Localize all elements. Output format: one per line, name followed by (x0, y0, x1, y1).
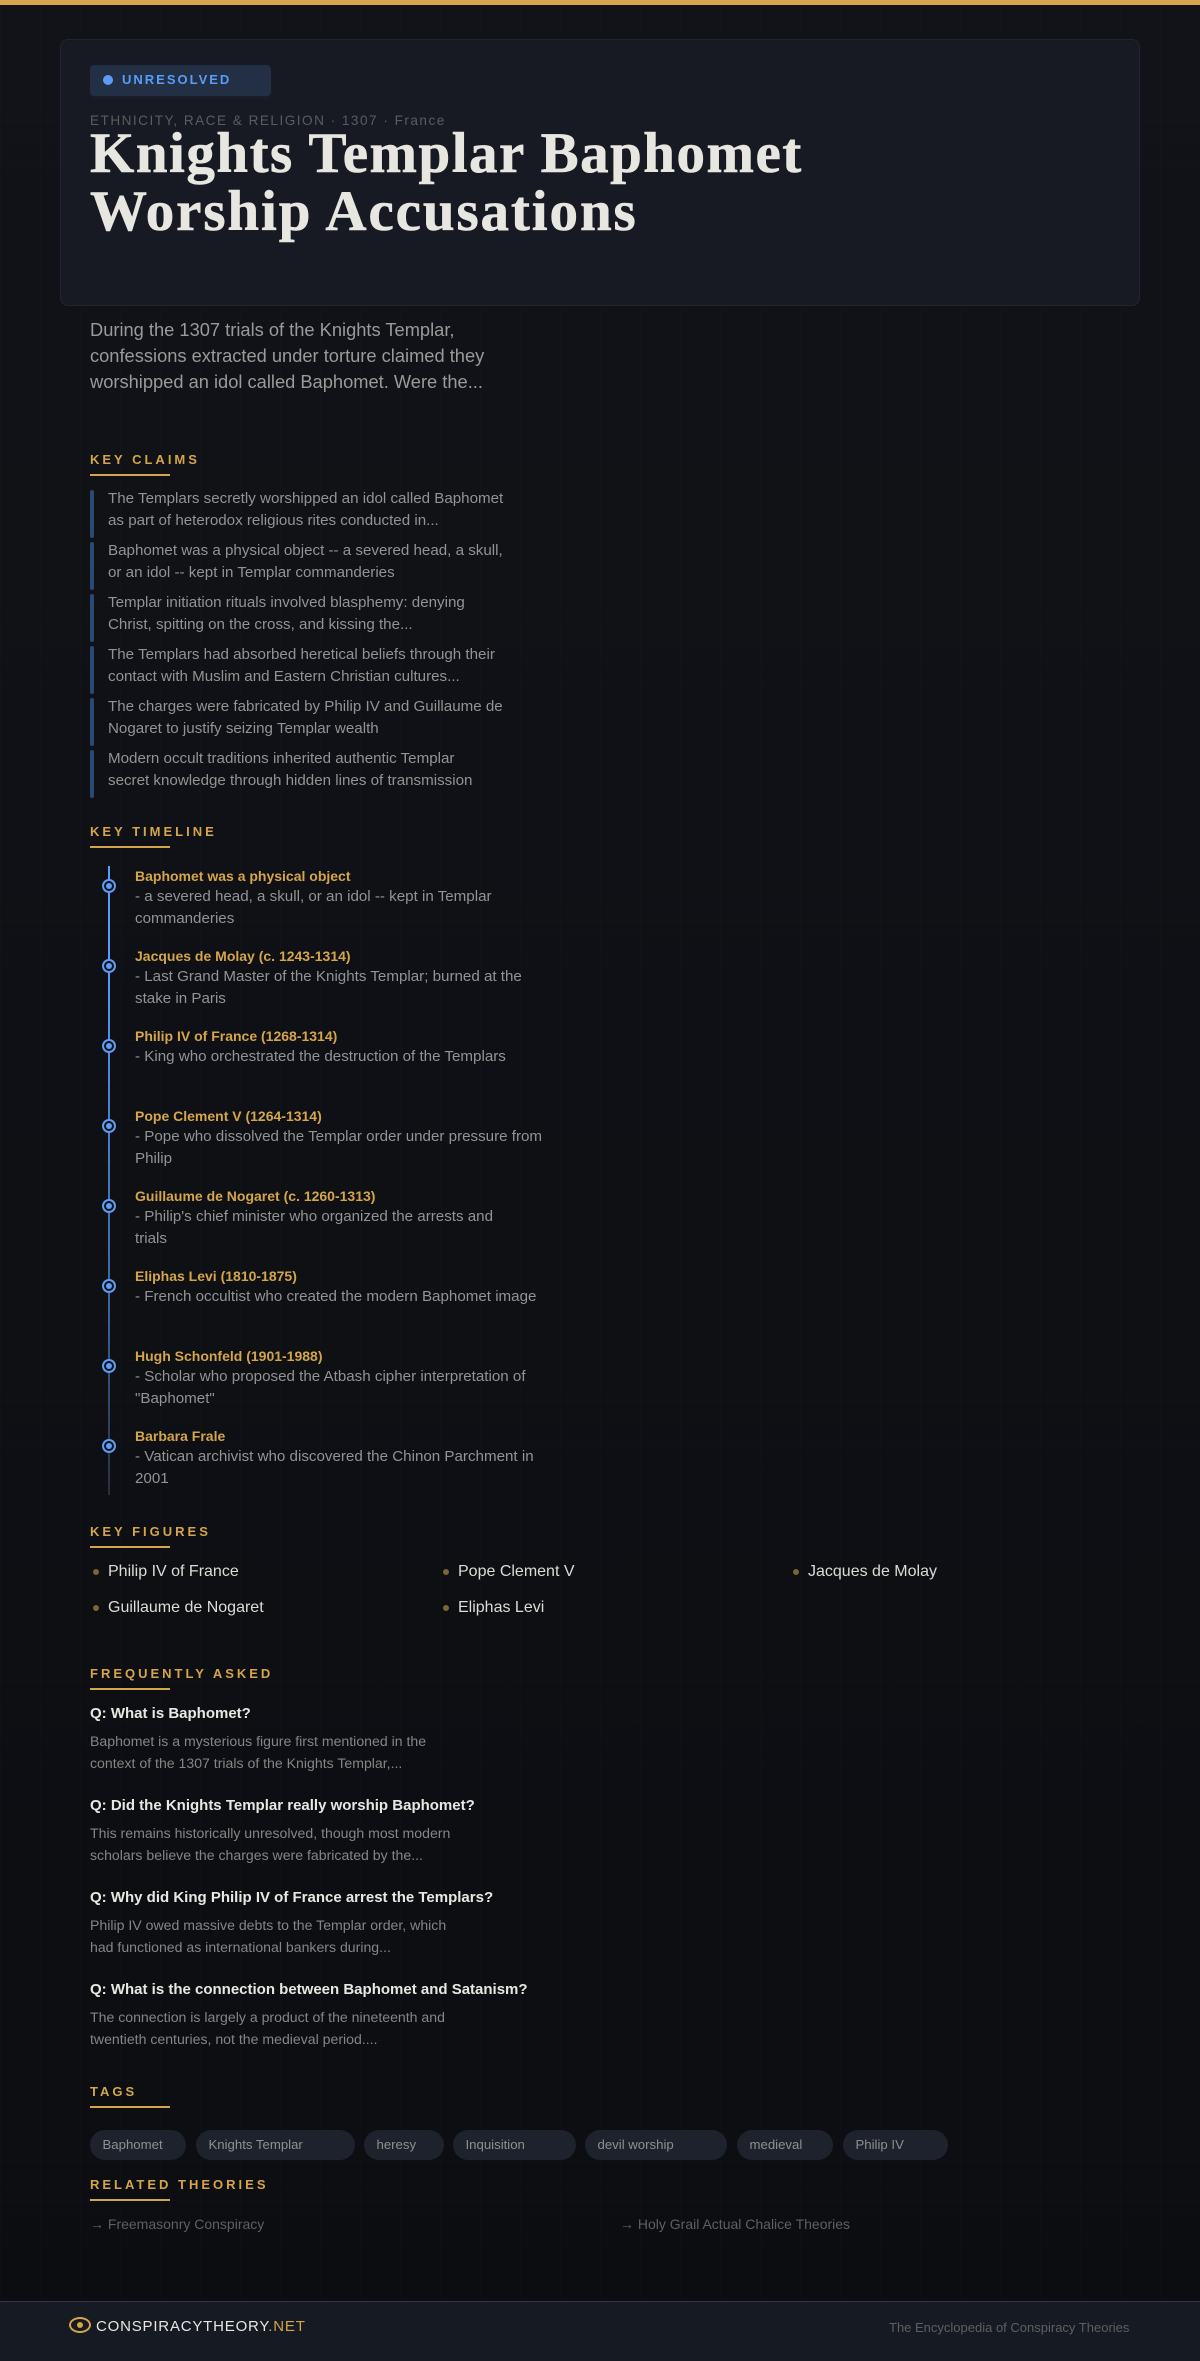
event 1: - a severed head, a skull, or an idol -- kept in Templar (135, 888, 492, 905)
FAQ 3 (90, 1889, 493, 1955)
related link: Freemasonry Conspiracy: → Freemasonry Conspiracy (90, 2216, 264, 2232)
event 5: trials (135, 1230, 167, 1247)
event 5: Guillaume de Nogaret (c. 1260-1313) (135, 1188, 375, 1204)
event 7 (102, 1348, 526, 1407)
event 6 (102, 1268, 536, 1305)
event 7: - Scholar who proposed the Atbash cipher interpretation of (135, 1368, 526, 1385)
figure: Jacques de Molay: Jacques de Molay (808, 1563, 937, 1580)
icon: status dot (103, 75, 113, 85)
event 3 (102, 1028, 506, 1065)
tag chips (90, 2130, 948, 2160)
claim 4: contact with Muslim and Eastern Christian cultures... (108, 668, 460, 685)
claim 1 (90, 490, 504, 538)
icon: eye logo (69, 2317, 91, 2333)
FAQ 3: Q: Why did King Philip IV of France arrest the Templars? (90, 1889, 493, 1906)
claim 6: secret knowledge through hidden lines of transmission (108, 772, 472, 789)
event 3: - King who orchestrated the destruction of the Templars (135, 1048, 506, 1065)
FAQ 2: scholars believe the charges were fabricated by the... (90, 1847, 423, 1863)
badge label: UNRESOLVED (122, 72, 231, 87)
event 2: stake in Paris (135, 990, 226, 1007)
claim 5: The charges were fabricated by Philip IV and Guillaume de (108, 698, 503, 715)
top accent bar (0, 0, 1200, 5)
FAQ 3: had functioned as international bankers during... (90, 1939, 391, 1955)
claim 3 (90, 594, 465, 642)
tag: devil worship: devil worship (598, 2137, 674, 2152)
event 7: "Baphomet" (135, 1390, 215, 1407)
event 6: Eliphas Levi (1810-1875) (135, 1268, 297, 1284)
tag: Knights Templar (196, 2130, 355, 2160)
event 4: - Pope who dissolved the Templar order under pressure from (135, 1128, 542, 1145)
heading: frequently asked: FREQUENTLY ASKED (90, 1666, 273, 1681)
FAQ 3: Philip IV owed massive debts to the Templar order, which (90, 1917, 446, 1933)
event 1: commanderies (135, 910, 234, 927)
tag: medieval (737, 2130, 833, 2160)
event 5: - Philip's chief minister who organized the arrests and (135, 1208, 493, 1225)
figure: Guillaume de Nogaret: Guillaume de Nogaret (108, 1599, 264, 1616)
claim list (90, 490, 504, 798)
FAQ 2: This remains historically unresolved, though most modern (90, 1825, 450, 1841)
claim 2 (90, 542, 503, 590)
tag: Baphomet (90, 2130, 186, 2160)
FAQ 1: context of the 1307 trials of the Knights Templar,... (90, 1755, 402, 1771)
event 1: Baphomet was a physical object (135, 868, 351, 884)
key figures list (93, 1563, 937, 1616)
heading: key timeline: KEY TIMELINE (90, 824, 217, 839)
figure: Eliphas Levi: Eliphas Levi (458, 1599, 544, 1616)
FAQ 2 (90, 1797, 475, 1863)
claim 4: The Templars had absorbed heretical beliefs through their (108, 646, 495, 663)
figure: Philip IV of France: Philip IV of France (108, 1563, 239, 1580)
claim 5 (90, 698, 503, 746)
category meta line: ETHNICITY, RACE & RELIGION · 1307 · France (90, 113, 446, 128)
claim 6: Modern occult traditions inherited authentic Templar (108, 750, 454, 767)
FAQ 2: Q: Did the Knights Templar really worship Baphomet? (90, 1797, 475, 1814)
FAQ 4 (90, 1981, 528, 2047)
event 8: 2001 (135, 1470, 169, 1487)
tag: heresy (364, 2130, 444, 2160)
claim 5: Nogaret to justify seizing Templar wealth (108, 720, 379, 737)
tag: Baphomet: Baphomet (102, 2137, 163, 2152)
related link: Holy Grail Actual Chalice Theories: → Holy Grail Actual Chalice Theories (620, 2216, 850, 2232)
event 5 (102, 1188, 493, 1247)
FAQ 1 (90, 1705, 426, 1771)
title: Worship Accusations (90, 180, 638, 243)
event 4 (102, 1108, 542, 1167)
event 6: - French occultist who created the modern Baphomet image (135, 1288, 536, 1305)
heading: tags: TAGS (90, 2084, 137, 2099)
intro text: confessions extracted under torture claimed they (90, 345, 484, 366)
claim 2: Baphomet was a physical object -- a severed head, a skull, (108, 542, 503, 559)
tag: medieval: medieval (750, 2137, 802, 2152)
claim 1: as part of heterodox religious rites conducted in... (108, 512, 439, 529)
claim 3: Christ, spitting on the cross, and kissing the... (108, 616, 413, 633)
logo wordmark: CONSPIRACYTHEORY.NET (96, 2318, 306, 2335)
tag: devil worship (585, 2130, 727, 2160)
tag: Inquisition (453, 2130, 576, 2160)
FAQ 4: Q: What is the connection between Baphomet and Satanism? (90, 1981, 528, 1998)
FAQ list (90, 1705, 528, 2047)
tag: heresy: heresy (376, 2137, 416, 2152)
event 2: - Last Grand Master of the Knights Templar; burned at the (135, 968, 522, 985)
figure: Pope Clement V: Pope Clement V (458, 1563, 575, 1580)
footer (0, 2301, 1200, 2361)
intro text: worshipped an idol called Baphomet. Were the... (90, 371, 483, 392)
heading: related theories: RELATED THEORIES (90, 2177, 268, 2192)
event 3: Philip IV of France (1268-1314) (135, 1028, 337, 1044)
timeline (102, 866, 542, 1495)
event 4: Pope Clement V (1264-1314) (135, 1108, 322, 1124)
claim 4 (90, 646, 495, 694)
event 2: Jacques de Molay (c. 1243-1314) (135, 948, 351, 964)
intro text (90, 319, 484, 392)
event 2 (102, 948, 522, 1007)
event 4: Philip (135, 1150, 172, 1167)
tag: Knights Templar: Knights Templar (208, 2137, 303, 2152)
tag: Philip IV: Philip IV (856, 2137, 904, 2152)
claim 6 (90, 750, 472, 798)
claim 1: The Templars secretly worshipped an idol called Baphomet (108, 490, 503, 507)
event 7: Hugh Schonfeld (1901-1988) (135, 1348, 322, 1364)
event 8: Barbara Frale (135, 1428, 225, 1444)
footer tagline: The Encyclopedia of Conspiracy Theories (889, 2320, 1129, 2335)
FAQ 1: Baphomet is a mysterious figure first mentioned in the (90, 1733, 426, 1749)
event 1 (102, 868, 492, 927)
title: Knights Templar Baphomet (90, 122, 803, 185)
FAQ 1: Q: What is Baphomet? (90, 1705, 251, 1722)
event 8: - Vatican archivist who discovered the Chinon Parchment in (135, 1448, 534, 1465)
heading: key claims: KEY CLAIMS (90, 452, 200, 467)
title (90, 122, 803, 243)
intro text: During the 1307 trials of the Knights Templar, (90, 319, 454, 340)
claim 2: or an idol -- kept in Templar commanderies (108, 564, 395, 581)
FAQ 4: The connection is largely a product of the nineteenth and (90, 2009, 445, 2025)
timeline spine (108, 866, 110, 1495)
panel: header (60, 39, 1140, 306)
event 8 (102, 1428, 534, 1487)
tag: Philip IV (843, 2130, 948, 2160)
heading: key figures: KEY FIGURES (90, 1524, 211, 1539)
tag: Inquisition: Inquisition (466, 2137, 525, 2152)
status badge: unresolved (90, 65, 271, 96)
claim 3: Templar initiation rituals involved blasphemy: denying (108, 594, 465, 611)
FAQ 4: twentieth centuries, not the medieval period.... (90, 2031, 378, 2047)
